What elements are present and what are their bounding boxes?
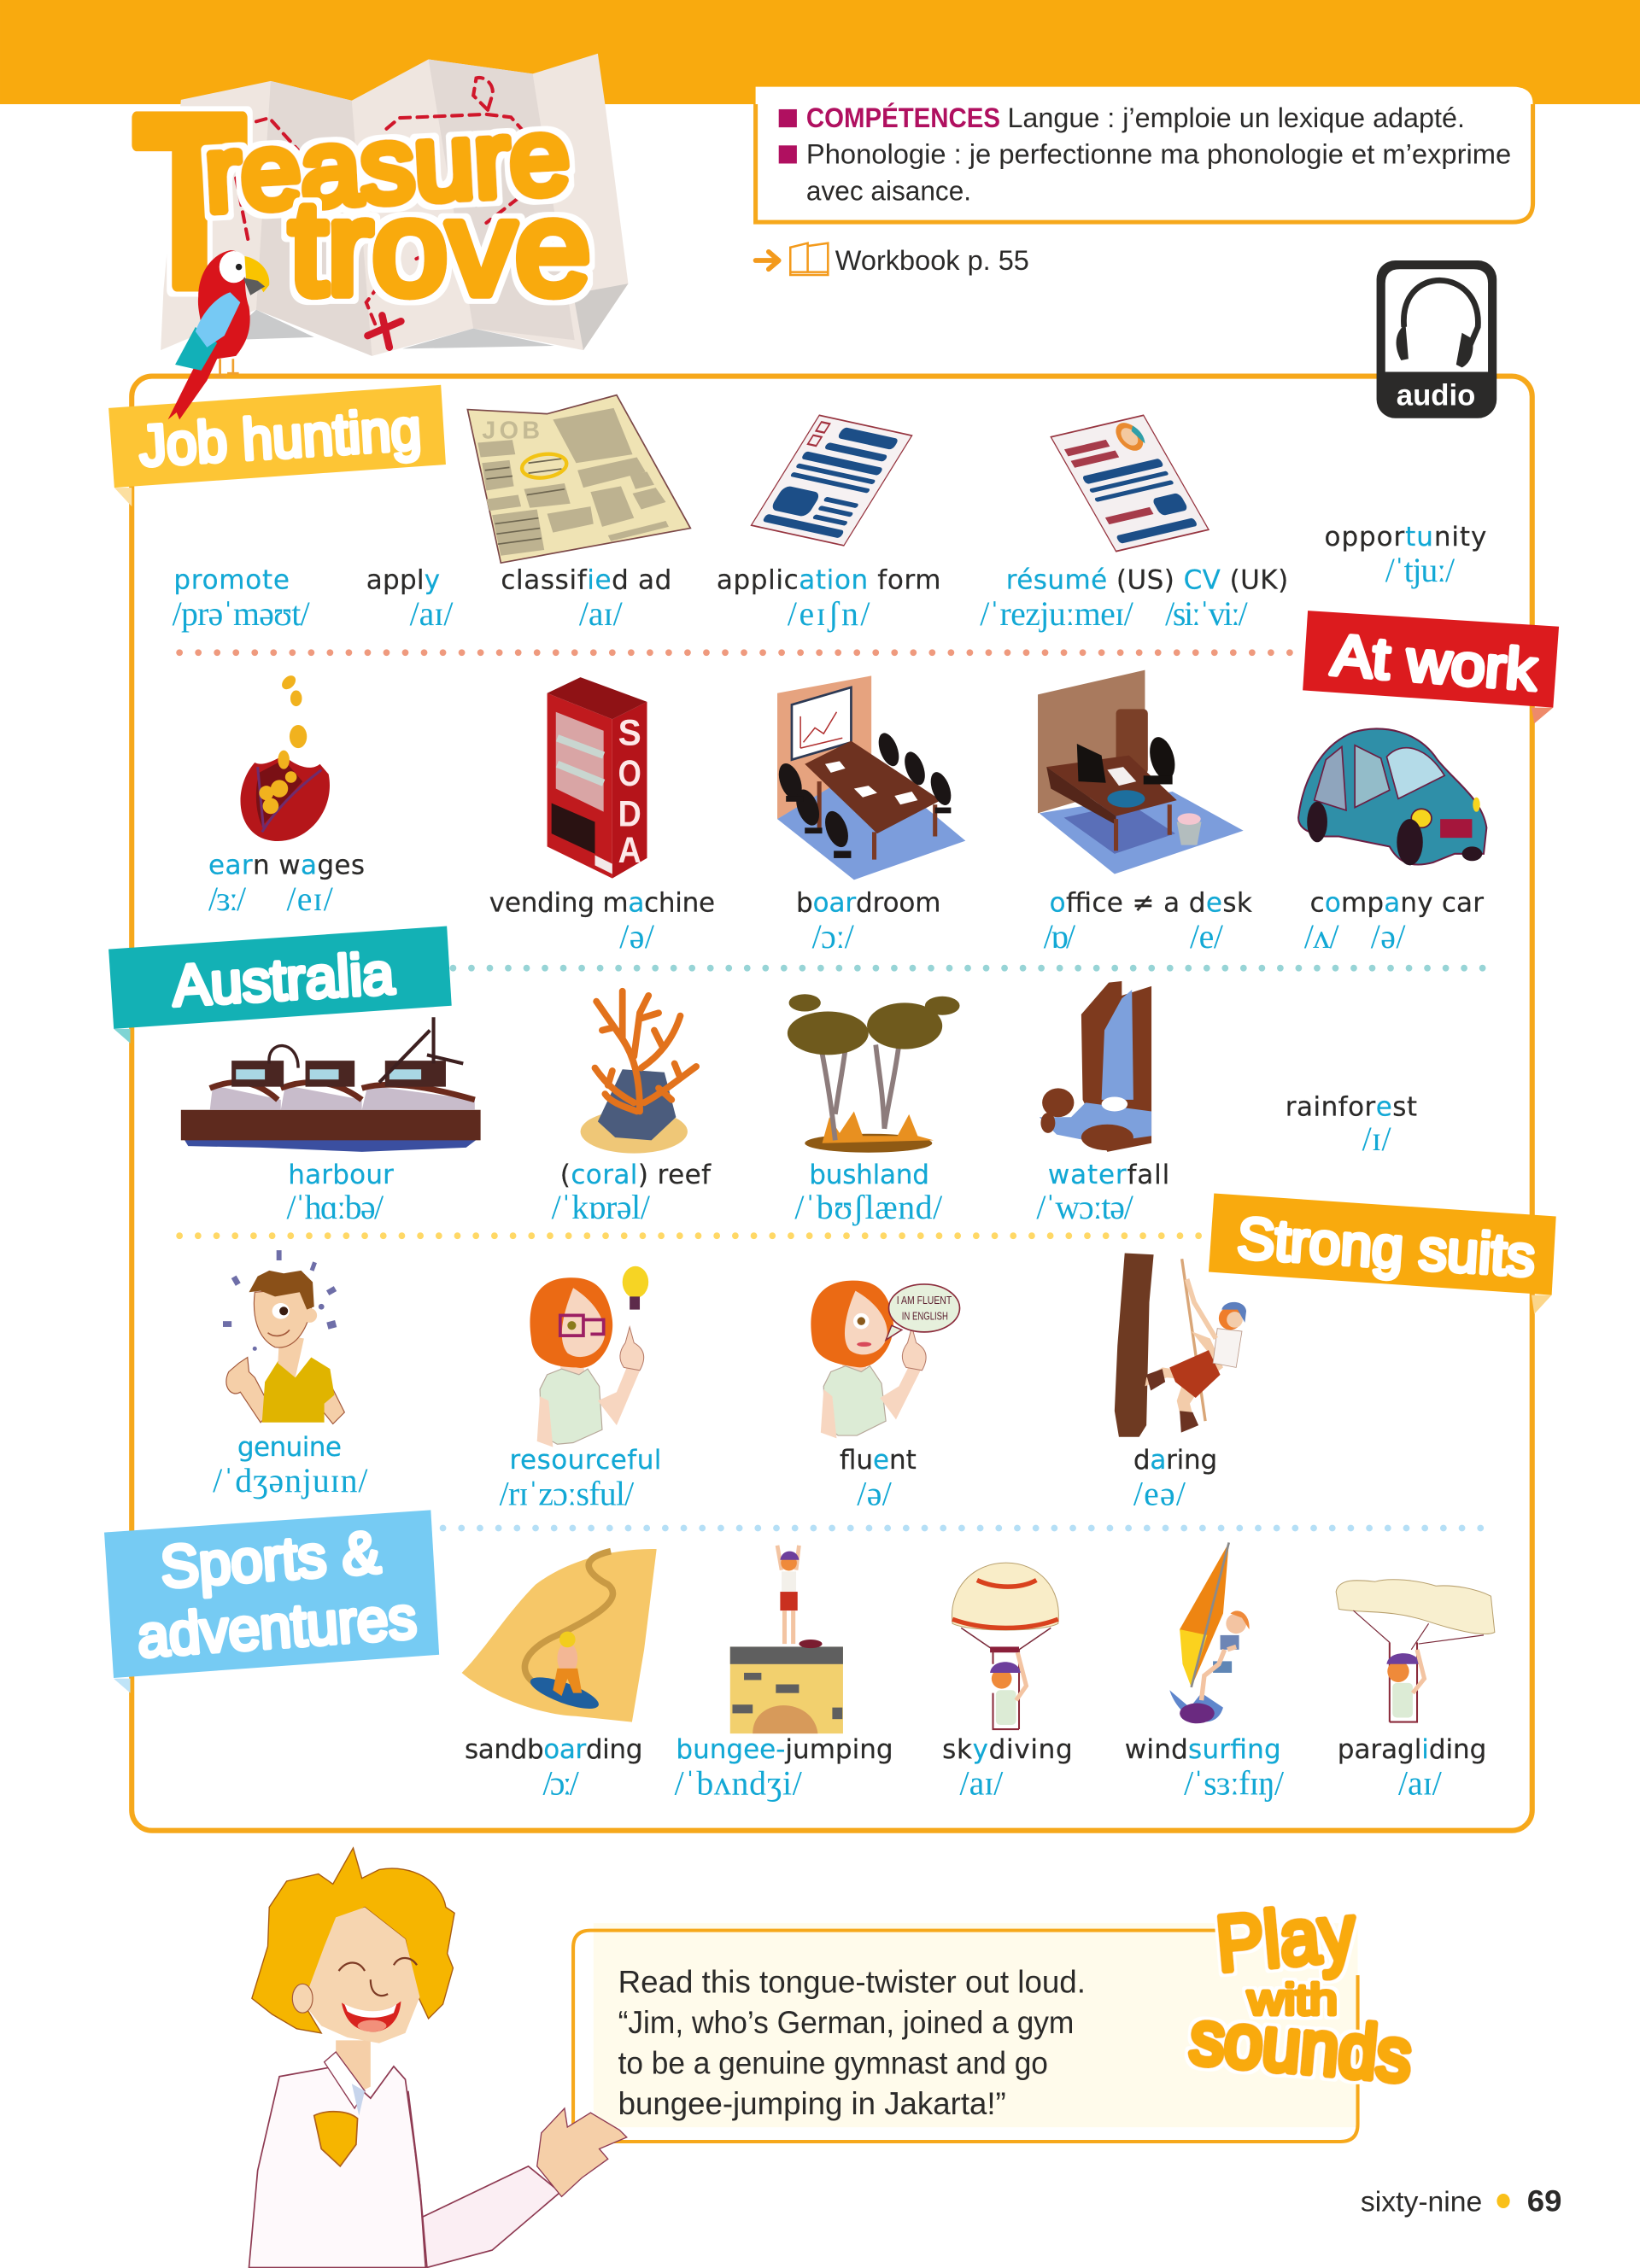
- word: rainforest: [1286, 1092, 1417, 1158]
- word: paragliding: /aɪ/: [1398, 1764, 1443, 1802]
- word: bungee-jumping: [675, 1734, 893, 1802]
- skills box: compétences: Langue : j’emploie un lexique adapté.: [1007, 102, 1465, 133]
- word: résumé CV: [980, 565, 1288, 633]
- word: company car: /ə/: [1371, 918, 1406, 956]
- word: office desk: /e/: [1190, 918, 1224, 956]
- icon: vending machine: S: [618, 713, 641, 753]
- word: fluent: [840, 1445, 917, 1512]
- word: résumé CV: /ˈrezjuːmeɪ/: [980, 595, 1134, 633]
- icon: fluent girl with speech bubble: IN ENGLISH: [902, 1310, 948, 1322]
- icon: vending machine: O: [618, 753, 641, 793]
- ribbon: Sports & adventures: [104, 1510, 439, 1693]
- word: résumé CV: /siːˈviː/: [1165, 595, 1249, 633]
- tongue-twister panel: to be a genuine gymnast and go: [618, 2044, 1048, 2080]
- word: vending machine: /ə/: [619, 918, 655, 956]
- word: boardroom: /ɔː/: [812, 918, 855, 956]
- word: bungee-jumping: bungee-jumping: [676, 1734, 893, 1765]
- icon: climber on a tree: [1115, 1254, 1246, 1437]
- icon: classified newspaper: JOB: [482, 417, 540, 444]
- icon: skydiving: [952, 1563, 1058, 1729]
- word: opportunity: opportunity: [1325, 522, 1486, 552]
- word: sandboarding: [465, 1734, 642, 1802]
- word: earn wages: /ɜː/: [208, 880, 247, 918]
- icon: resourceful girl with glasses and lightbulb: [530, 1266, 648, 1447]
- australia vocabulary: [287, 1092, 1417, 1226]
- word: daring: /eə/: [1133, 1475, 1186, 1512]
- word: waterfall: /ˈwɔːtə/: [1036, 1189, 1134, 1226]
- student character pointing at the panel: [249, 1848, 627, 2267]
- word: windsurfing: windsurfing: [1125, 1734, 1281, 1765]
- heading: Play with sounds: sounds: [1187, 1994, 1415, 2097]
- word: sandboarding: /ɔː/: [542, 1764, 580, 1802]
- word: paragliding: paragliding: [1338, 1734, 1486, 1765]
- icon: fluent girl with speech bubble: [811, 1281, 960, 1438]
- dotted divider teal: [453, 966, 1488, 970]
- word: classified ad: /aɪ/: [579, 595, 624, 633]
- icon: harbour boats: [181, 1017, 481, 1152]
- word: promote: [173, 565, 311, 633]
- word: fluent: /ə/: [857, 1475, 893, 1512]
- icon: coral reef: [581, 991, 696, 1154]
- word: genuine: /ˈdʒənjuɪn/: [213, 1462, 368, 1499]
- vocabulary panel outline: [132, 377, 1532, 1831]
- word: windsurfing: /ˈsɜːfɪŋ/: [1184, 1764, 1285, 1802]
- word: company car: /ʌ/: [1304, 918, 1339, 956]
- icon: confident man: [223, 1250, 344, 1423]
- word: harbour: [287, 1160, 394, 1226]
- word: apply: apply: [366, 565, 440, 596]
- ribbon: Strong suits: Strong suits: [1235, 1207, 1537, 1289]
- word: daring: daring: [1133, 1445, 1217, 1476]
- icon: bungee-jumping: [730, 1546, 843, 1733]
- tongue-twister panel: [573, 1923, 1358, 2142]
- title: Treasure trove: trove: [290, 174, 590, 323]
- icon: sandboarding: [462, 1549, 657, 1722]
- word: bushland: /ˈbʊʃlænd/: [794, 1189, 943, 1226]
- word: coral reef: (coral) reef: [560, 1160, 712, 1190]
- word: coral reef: /ˈkɒrəl/: [552, 1189, 651, 1226]
- word: office desk: office ≠ a desk: [1050, 888, 1252, 919]
- word: windsurfing: [1125, 1734, 1285, 1802]
- ribbon: Job hunting: [108, 385, 446, 506]
- word: earn wages: /eɪ/: [287, 880, 334, 918]
- word: application form: [717, 565, 940, 633]
- ribbon: Sports & adventures: adventures: [135, 1584, 419, 1669]
- dotted divider blue: [443, 1526, 1488, 1530]
- word: résumé CV: résumé (US) CV (UK): [1006, 565, 1288, 596]
- word: boardroom: [796, 888, 940, 956]
- audio icon: [1377, 260, 1496, 418]
- dotted divider yellow: [179, 1234, 1209, 1237]
- title: Treasure trove: T: [135, 66, 244, 337]
- icon: paragliding: [1336, 1580, 1495, 1722]
- page number footer: sixty-nine: [1361, 2186, 1482, 2218]
- word: paragliding: [1338, 1734, 1486, 1802]
- icon: windsurfing: [1169, 1542, 1250, 1723]
- treasure map illustration: [161, 54, 628, 356]
- word: harbour: /ˈhɑːbə/: [287, 1189, 384, 1226]
- word: bushland: [794, 1160, 943, 1226]
- icon: boardroom: [775, 675, 965, 880]
- ribbon: At work: At work: [1329, 623, 1539, 703]
- icon: application form: [752, 415, 912, 546]
- ribbon: Australia: Australia: [171, 942, 395, 1019]
- dotted divider coral: [179, 651, 1296, 655]
- icon: classified newspaper: [467, 395, 690, 563]
- word: company car: [1304, 888, 1484, 956]
- word: genuine: genuine: [237, 1432, 342, 1463]
- word: waterfall: [1036, 1160, 1169, 1226]
- earn wages to company car vocabulary: [208, 850, 1484, 956]
- parrot: [168, 250, 269, 419]
- word: bushland: bushland: [809, 1160, 929, 1190]
- word: skydiving: [942, 1734, 1073, 1802]
- ribbon: Strong suits: [1209, 1194, 1556, 1314]
- word: apply: /aɪ/: [410, 595, 454, 633]
- icon: bushland trees: [788, 994, 960, 1153]
- word: office desk: [1044, 888, 1252, 956]
- word: boardroom: boardroom: [796, 888, 940, 919]
- job hunting vocabulary: [173, 522, 1486, 633]
- word: coral reef: [552, 1160, 712, 1226]
- strong suits vocabulary: [213, 1432, 1217, 1512]
- word: application form: /eɪʃn/: [788, 595, 870, 633]
- heading: Play with sounds: [1187, 1889, 1415, 2097]
- heading: Play with sounds: with: [1247, 1975, 1338, 2024]
- word: genuine: [213, 1432, 368, 1499]
- heading: Play with sounds: Play: [1213, 1889, 1359, 1988]
- word: earn wages: earn wages: [208, 850, 365, 881]
- word: opportunity: /ˈtjuː/: [1385, 552, 1456, 589]
- word: opportunity: [1325, 522, 1486, 589]
- word: company car: company car: [1310, 888, 1484, 919]
- ribbon: Sports & adventures: Sports &: [158, 1518, 383, 1600]
- ribbon: Australia: [108, 926, 452, 1043]
- word: sandboarding: sandboarding: [465, 1734, 642, 1765]
- ribbon: At work: [1303, 611, 1559, 723]
- word: promote: promote: [173, 565, 290, 596]
- word: bungee-jumping: /ˈbʌndʒi/: [675, 1764, 803, 1802]
- word: skydiving: /aɪ/: [960, 1764, 1004, 1802]
- icon: fluent girl with speech bubble: I AM FLUENT: [897, 1295, 952, 1306]
- skills box: compétences: Phonologie : je perfectionne ma phonologie et m’exprime: [806, 138, 1511, 169]
- workbook reference: [756, 243, 1029, 276]
- title: Treasure trove: [135, 66, 590, 337]
- title: Treasure trove: reasure: [202, 95, 572, 234]
- icon: waterfall: [1040, 981, 1151, 1152]
- page number footer: [1361, 2183, 1561, 2218]
- skills box: compétences: [756, 87, 1533, 222]
- word: harbour: harbour: [288, 1160, 394, 1190]
- ribbon: Job hunting: Job hunting: [138, 398, 423, 479]
- icon: office desk: [1038, 670, 1244, 874]
- word: vending machine: vending machine: [489, 888, 715, 919]
- tongue-twister panel: Read this tongue-twister out loud.: [618, 1963, 1086, 1999]
- sports vocabulary: [465, 1734, 1486, 1802]
- word: fluent: fluent: [840, 1445, 917, 1476]
- icon: purse with coins: [240, 673, 330, 841]
- word: earn wages: [208, 850, 365, 918]
- tongue-twister panel: “Jim, who’s German, joined a gym: [618, 2004, 1074, 2040]
- icon: vending machine: D: [618, 794, 641, 834]
- icon: résumé: [1051, 415, 1209, 552]
- word: office desk: /ɒ/: [1044, 918, 1076, 956]
- word: resourceful: resourceful: [510, 1445, 661, 1476]
- word: apply: [366, 565, 454, 633]
- word: application form: application form: [717, 565, 940, 596]
- word: rainforest: rainforest: [1286, 1092, 1417, 1123]
- word: rainforest: /ɪ/: [1362, 1120, 1391, 1158]
- top orange band: [0, 0, 1640, 104]
- word: vending machine: [489, 888, 715, 956]
- skills box: compétences: COMPÉTENCES: [806, 102, 1000, 133]
- word: waterfall: waterfall: [1048, 1160, 1169, 1190]
- word: classified ad: [501, 565, 671, 633]
- tongue-twister panel: bungee-jumping in Jakarta!”: [618, 2085, 1006, 2121]
- audio icon: audio: [1397, 379, 1475, 412]
- word: skydiving: skydiving: [942, 1734, 1073, 1765]
- word: resourceful: /rɪˈzɔːsful/: [500, 1475, 635, 1512]
- word: resourceful: [500, 1445, 661, 1512]
- word: daring: [1133, 1445, 1217, 1512]
- page number footer: 69: [1527, 2183, 1561, 2218]
- word: classified ad: classified ad: [501, 565, 671, 596]
- icon: vending machine: [548, 677, 647, 879]
- word: promote: /prəˈməʊt/: [173, 595, 311, 633]
- icon: company car: [1298, 728, 1486, 865]
- icon: vending machine: A: [618, 830, 641, 870]
- skills box: compétences: avec aisance.: [806, 176, 971, 207]
- workbook reference: Workbook p. 55: [835, 245, 1029, 276]
